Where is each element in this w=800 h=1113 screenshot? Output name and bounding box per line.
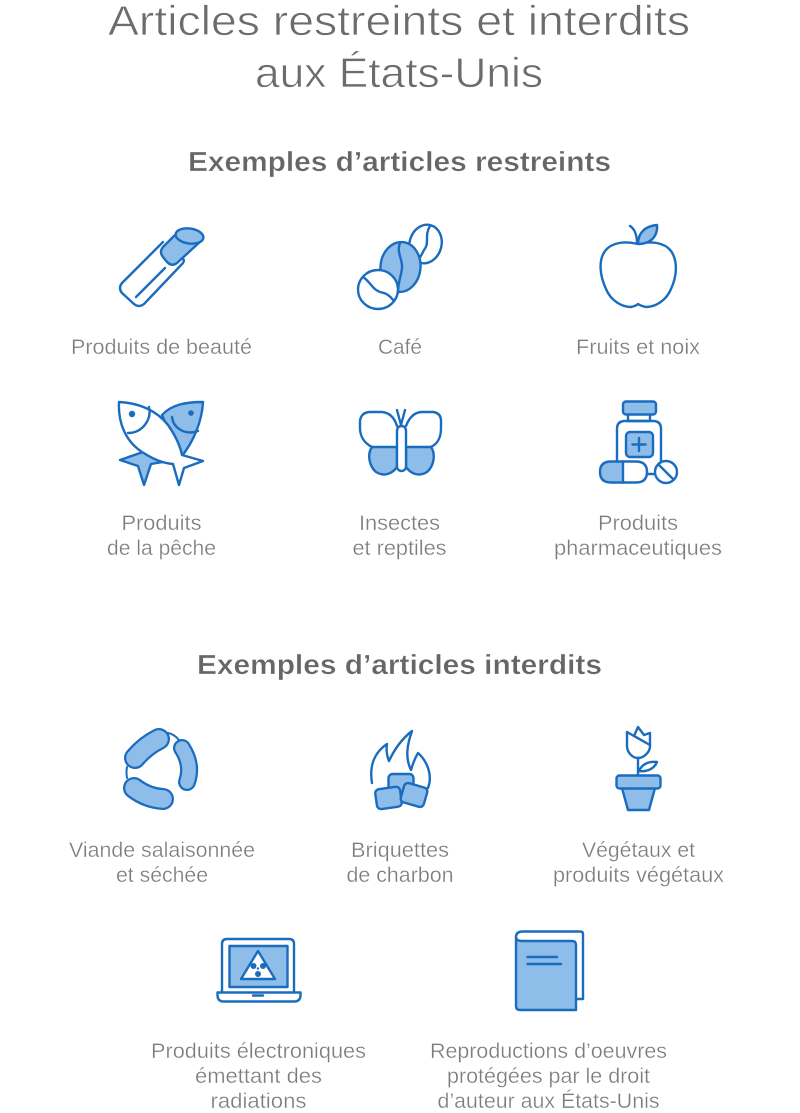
item: radiation-emitting electronics: radiations xyxy=(210,1090,306,1113)
item: fruits and nuts xyxy=(576,225,701,359)
title: aux États-Unis xyxy=(255,49,543,96)
title xyxy=(108,0,690,96)
item: insects and reptiles xyxy=(352,410,446,560)
item: fishery products xyxy=(107,402,216,560)
item: beauty products xyxy=(71,227,252,359)
heading: prohibited items: Exemples d’articles interdits xyxy=(197,649,602,680)
icon: two fish xyxy=(119,402,203,485)
item: copyright-infringing reproductions: d’auteur aux États-Unis xyxy=(438,1090,660,1113)
item: plants and plant products: produits végétaux xyxy=(553,864,725,887)
icon: laptop with radiation symbol xyxy=(218,939,300,1002)
item: fishery products: de la pêche xyxy=(107,537,216,560)
item: pharmaceutical products xyxy=(554,402,722,560)
label: Produits xyxy=(122,512,202,535)
label: Insectes xyxy=(359,512,440,535)
label: Viande salaisonnée xyxy=(69,839,255,862)
label: Fruits et noix xyxy=(576,336,701,359)
label: Café xyxy=(378,336,422,359)
icon: coffee beans xyxy=(358,221,446,309)
icon: lipstick xyxy=(120,227,204,306)
item: cured and dried meat: et séchée xyxy=(116,864,208,887)
item: copyright-infringing reproductions: protégées par le droit xyxy=(447,1065,650,1088)
label: Produits de beauté xyxy=(71,336,252,359)
heading: restricted items: Exemples d’articles restreints xyxy=(188,146,611,177)
icon: butterfly xyxy=(360,410,441,474)
item: plants and plant products xyxy=(553,727,725,887)
label: Produits xyxy=(598,512,678,535)
label: Végétaux et xyxy=(582,839,695,862)
item: insects and reptiles: et reptiles xyxy=(352,537,446,560)
item: charcoal briquettes xyxy=(346,731,454,887)
item: radiation-emitting electronics: émettant des xyxy=(195,1065,322,1088)
item: coffee xyxy=(358,221,446,359)
icon: sausage ring xyxy=(126,733,189,799)
label: Briquettes xyxy=(351,839,449,862)
icon: flame and briquettes xyxy=(371,731,430,810)
item: charcoal briquettes: de charbon xyxy=(346,864,454,887)
item: cured and dried meat xyxy=(69,733,255,887)
item: copyright-infringing reproductions xyxy=(430,932,667,1113)
label: Produits électroniques xyxy=(151,1040,366,1063)
icon: apple xyxy=(601,225,676,307)
item: pharmaceutical products: pharmaceutiques xyxy=(554,537,722,560)
icon: book xyxy=(516,932,583,1010)
icon: potted flower xyxy=(616,727,660,810)
label: Reproductions d’oeuvres xyxy=(430,1040,667,1063)
icon: medicine bottle and pills xyxy=(600,402,677,483)
item: radiation-emitting electronics xyxy=(151,939,366,1113)
